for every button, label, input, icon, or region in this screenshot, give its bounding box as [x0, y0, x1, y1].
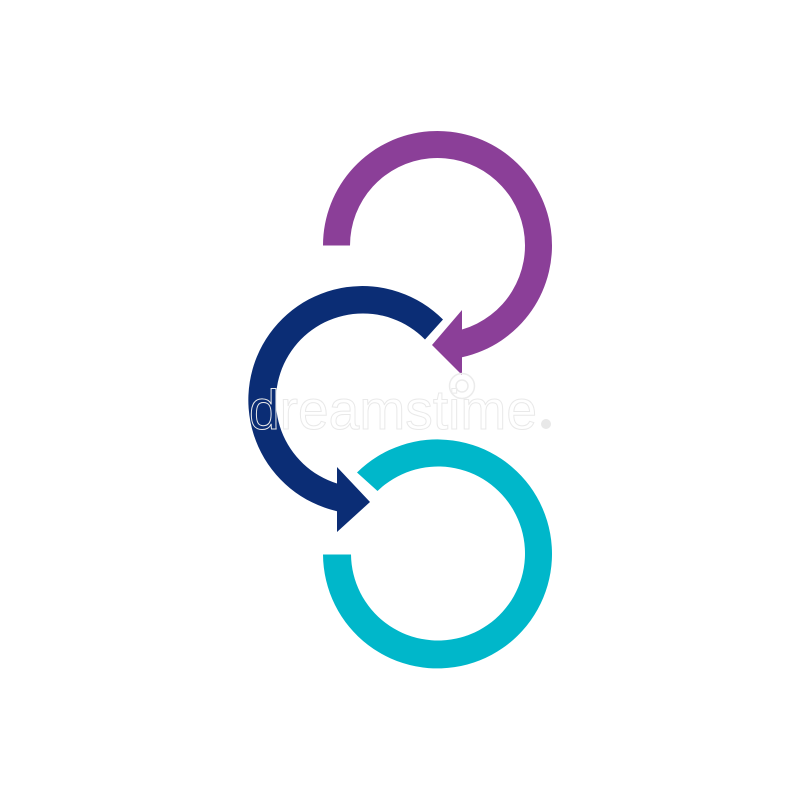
arrow: purple circular arrow [323, 131, 552, 375]
arrow: navy circular arrow [248, 286, 443, 532]
arrow: teal circular segment [323, 439, 552, 668]
watermark: dreamstime text and logo: dreamstime [249, 378, 537, 441]
